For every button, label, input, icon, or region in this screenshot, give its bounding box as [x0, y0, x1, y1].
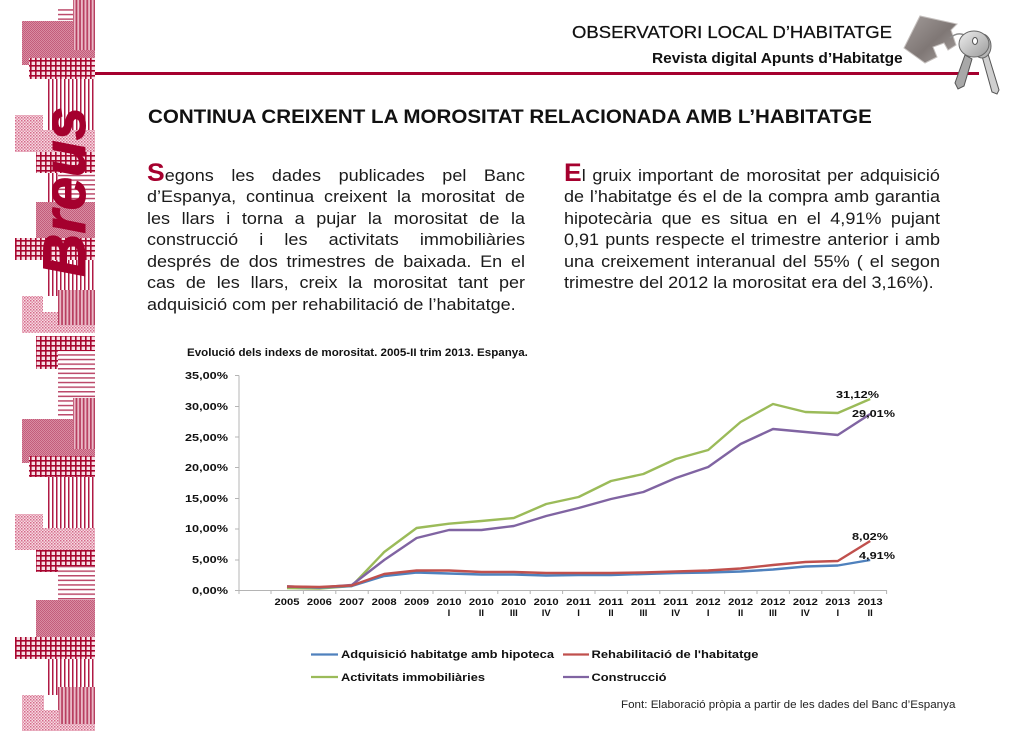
legend: Activitats immobiliàries [341, 672, 485, 684]
source note: Font: Elaboració pròpia a partir de les dades del Banc d’Espanya [621, 699, 955, 711]
legend: Adquisició habitatge amb hipoteca [341, 649, 555, 661]
text block: right column [564, 158, 940, 292]
series: Rehabilitació de l'habitatge [287, 541, 870, 587]
header: magazine name: Revista digital Apunts d’Habitatge [652, 51, 903, 67]
text block: left column: adquisició com per rehabilitació de l’habitatge. [147, 295, 516, 314]
pattern group: lower sidebar [15, 351, 95, 731]
x axis labels: II [868, 608, 873, 619]
y axis labels: 0,00% [192, 585, 229, 597]
text block: left column [147, 158, 526, 314]
x axis labels: II [479, 608, 484, 619]
x axis labels: 2011 [631, 597, 657, 608]
x axis labels: 2013 [825, 597, 850, 608]
text block: left column: d’Espanya, continua creixent la morositat de [147, 187, 525, 206]
legend: Construcció [592, 672, 667, 684]
x axis labels: I [836, 608, 839, 619]
data labels: 8,02% [852, 531, 889, 543]
text block: right column: trimestre del 2012 la morositat era del 3,16%). [564, 273, 934, 292]
x axis labels: 2012 [696, 597, 721, 608]
x axis labels: 2011 [663, 597, 689, 608]
x axis labels: III [769, 608, 777, 619]
x axis labels: I [577, 608, 580, 619]
x axis labels: 2012 [760, 597, 786, 608]
y axis labels [185, 370, 229, 597]
series: Construcció [287, 414, 870, 588]
x axis labels: IV [801, 608, 811, 619]
chart axes [235, 376, 887, 594]
legend [311, 649, 758, 684]
x axis labels: 2010 [469, 597, 494, 608]
text block: right column: de l’habitatge és el de la compra amb garantia [564, 187, 940, 206]
sidebar: patterned blocks with Breus wordmark [15, 0, 98, 731]
x axis labels: II [608, 608, 614, 619]
x axis labels: 2012 [728, 597, 753, 608]
title: CONTINUA CREIXENT LA MOROSITAT RELACIONADA AMB L’HABITATGE [148, 106, 872, 128]
x axis labels: III [639, 608, 647, 619]
y axis labels: 5,00% [192, 554, 229, 566]
x axis labels: 2011 [598, 597, 624, 608]
x axis labels: IV [671, 608, 681, 619]
x axis labels: 2010 [436, 597, 462, 608]
y axis labels: 25,00% [185, 432, 229, 444]
header rule [95, 72, 979, 75]
y axis labels: 15,00% [185, 493, 229, 505]
data labels: 4,91% [859, 550, 896, 562]
header: observatory name: OBSERVATORI LOCAL D’HABITATGE [572, 22, 892, 42]
x axis labels: 2009 [404, 597, 429, 608]
legend: Rehabilitació de l'habitatge [592, 649, 758, 661]
text block: right column: una creixement interanual del 55% ( el segon [564, 252, 940, 271]
x axis labels: 2011 [566, 597, 592, 608]
y axis labels: 10,00% [185, 523, 229, 535]
x axis labels: II [738, 608, 743, 619]
x axis labels: 2005 [274, 597, 300, 608]
text block: left column: construcció i les activitats immobiliàries [147, 230, 525, 249]
text block: left column: les llars i torna a pujar la morositat de la [147, 209, 525, 228]
pattern group: upper sidebar [15, 0, 95, 351]
x axis labels: 2007 [339, 597, 364, 608]
y axis labels: 35,00% [185, 370, 229, 382]
x axis labels: I [707, 608, 710, 619]
y axis labels: 30,00% [185, 401, 229, 413]
wordmark: Breus: Breus [31, 107, 98, 277]
text block: right column: El gruix important de morositat per adquisició [564, 158, 940, 186]
data labels: 29,01% [852, 408, 896, 420]
x axis labels [274, 597, 883, 619]
series: Adquisició habitatge amb hipoteca [287, 560, 870, 588]
chart title: Evolució dels indexs de morositat. 2005-II trim 2013. Espanya. [187, 347, 528, 359]
x axis labels: 2012 [793, 597, 818, 608]
x axis labels: 2013 [858, 597, 883, 608]
x axis labels: 2010 [501, 597, 526, 608]
x axis labels: 2010 [534, 597, 559, 608]
x axis labels: 2008 [372, 597, 397, 608]
text block: right column: 0,91 punts respecte el trimestre anterior i amb [564, 230, 940, 249]
x axis labels: III [510, 608, 518, 619]
x axis labels: IV [542, 608, 551, 619]
y axis labels: 20,00% [185, 462, 229, 474]
text block: left column: després de dos trimestres de baixada. En el [147, 252, 525, 271]
text block: left column: Segons les dades publicades pel Banc [147, 158, 525, 186]
x axis labels: I [448, 608, 450, 619]
x axis labels: 2006 [307, 597, 332, 608]
text block: right column: hipotecària que es situa en el 4,91% pujant [564, 209, 940, 228]
icon: house and keys [904, 16, 1000, 95]
data labels: 31,12% [836, 389, 880, 401]
data labels [836, 389, 896, 562]
text block: left column: cas de les llars, creix la morositat tant per [147, 273, 525, 292]
series: Activitats immobiliàries [287, 399, 870, 588]
